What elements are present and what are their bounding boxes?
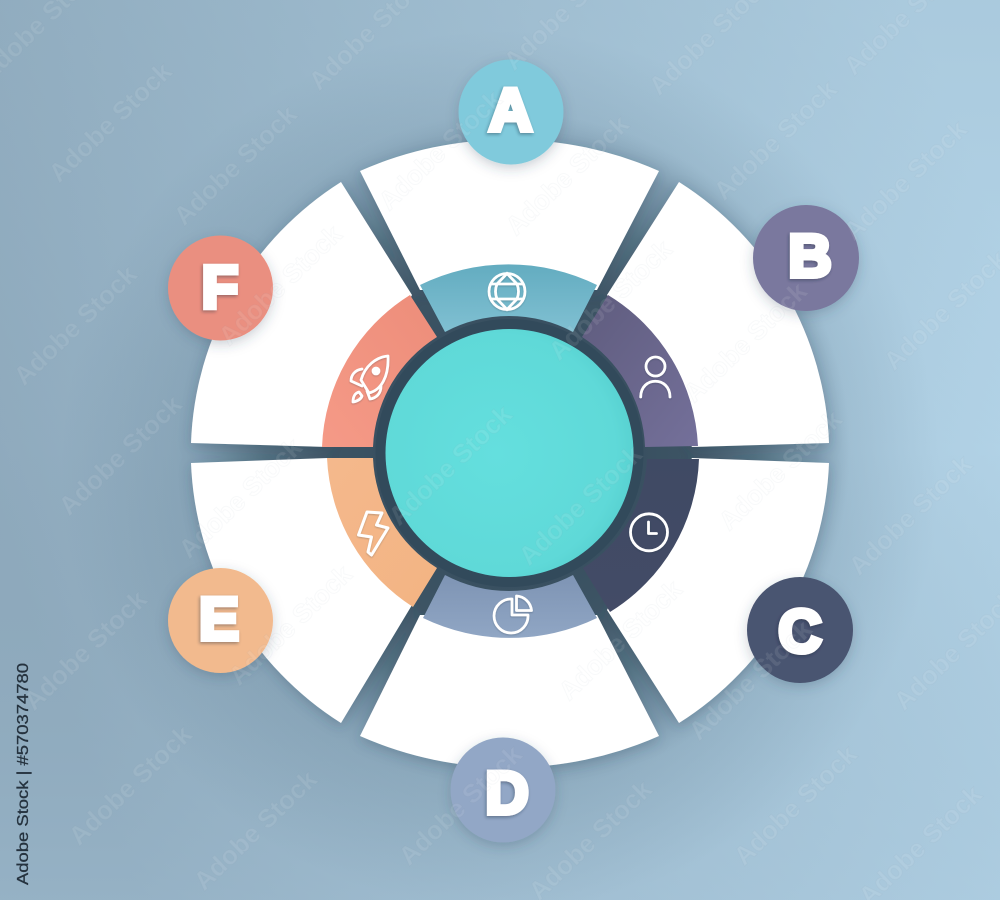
badge D: [450, 738, 556, 842]
badge B: B: [788, 222, 832, 290]
stock id label: Adobe Stock | #570374780: [15, 663, 32, 885]
watermarks: Adobe Stock: [222, 559, 358, 691]
ring segment D: [423, 575, 597, 638]
watermarks: Adobe Stock: [842, 449, 978, 581]
watermarks: Adobe Stock: [187, 764, 323, 896]
watermarks: Adobe Stock: [677, 276, 813, 408]
segment C panel: [607, 458, 829, 723]
segment B panel: [607, 182, 829, 447]
badge A: A: [489, 76, 532, 144]
watermarks: Adobe Stock: [52, 389, 188, 521]
ring segment C: [583, 459, 699, 612]
ring segment B: [582, 295, 698, 447]
watermarks: Adobe Stock: [172, 432, 308, 564]
watermarks: Adobe Stock: [17, 584, 153, 716]
badge F: F: [202, 254, 238, 320]
icon: lightning bolt: [358, 512, 388, 555]
watermarks: Adobe Stock: [212, 219, 348, 351]
watermarks: Adobe Stock: [42, 56, 178, 188]
watermarks: Adobe Stock: [707, 74, 843, 206]
badge D: D: [485, 760, 529, 826]
watermarks: Adobe Stock: [682, 614, 818, 746]
ring segment E: [327, 458, 437, 607]
watermarks: Adobe Stock: [512, 439, 648, 571]
watermarks: Adobe Stock: [552, 574, 688, 706]
badge C: [747, 577, 853, 683]
segment F panel: [191, 182, 412, 447]
inner coloured ring: [322, 264, 699, 638]
segment A panel: [360, 139, 659, 290]
watermarks: Adobe Stock: [62, 719, 198, 851]
icon: rocket: [351, 356, 388, 402]
icon: clock: [630, 514, 668, 551]
wheel of white segments: [191, 139, 829, 768]
icon: globe: [489, 274, 525, 310]
watermarks: Adobe Stock: [837, 114, 973, 246]
shadow disc visible through the gaps: [170, 112, 850, 792]
watermarks: Adobe Stock: [372, 84, 508, 216]
watermarks: Adobe Stock: [727, 739, 863, 871]
dark ring: [376, 319, 644, 587]
segment D panel: [360, 615, 659, 768]
watermarks: Adobe Stock: [499, 109, 635, 241]
central teal disc: [386, 329, 634, 577]
watermarks: Adobe Stock: [542, 234, 678, 366]
icon: user: [641, 357, 670, 397]
badge B: [753, 205, 859, 311]
segment E panel: [191, 458, 412, 723]
watermarks: Adobe Stock: [7, 259, 143, 391]
watermarks: Adobe Stock: [712, 404, 848, 536]
badge E: E: [199, 586, 239, 652]
ring segment F: [322, 295, 437, 447]
icon: pie chart: [494, 596, 532, 633]
watermarks: Adobe Stock: [167, 99, 303, 231]
badge C: C: [778, 598, 822, 665]
watermarks: Adobe Stock: [392, 739, 528, 871]
badge A: [458, 60, 564, 164]
watermarks: Adobe Stock: [382, 399, 518, 531]
badge E: [168, 568, 273, 673]
badge F: [168, 236, 273, 340]
ring segment A: [420, 264, 597, 332]
